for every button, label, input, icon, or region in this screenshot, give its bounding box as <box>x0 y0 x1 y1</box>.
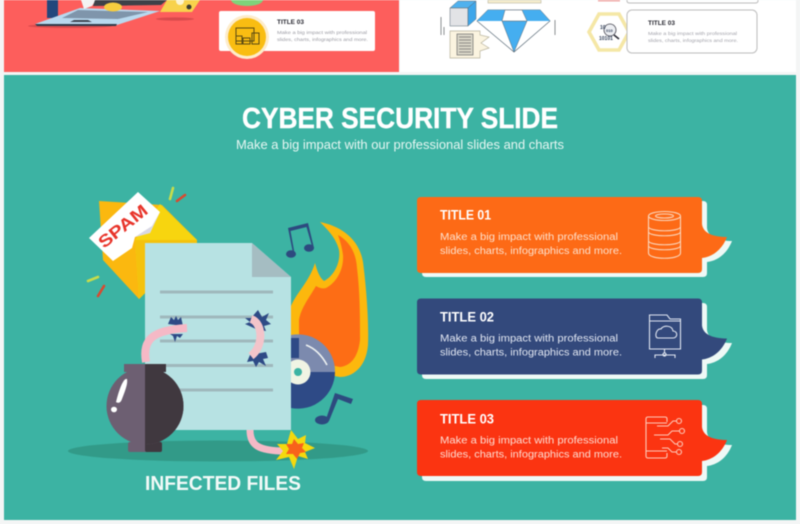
card: title 03: TITLE 03 <box>440 412 494 426</box>
icon: database <box>648 212 680 258</box>
card: title 01: Make a big impact with professional <box>440 232 618 243</box>
icon: cube <box>450 1 476 26</box>
icon: infected document <box>145 243 291 430</box>
illustration: infected files <box>68 188 368 495</box>
label: infected files: INFECTED FILES <box>145 472 301 495</box>
icon: cloud folder network <box>650 315 680 358</box>
icon: laptop with person <box>28 0 200 28</box>
card: title 03 red panel: TITLE 03 <box>277 19 304 26</box>
card: title 02: TITLE 02 <box>440 310 494 324</box>
panel: cropped red slide <box>4 0 399 72</box>
card: title 03 red panel: Make a big impact with professional <box>277 30 367 35</box>
icon: circuit phone <box>646 417 684 458</box>
card: title 02: Make a big impact with professional <box>440 334 618 344</box>
icon: worms and holes <box>145 310 285 451</box>
card: title 03 white panel: 10101 <box>599 36 613 42</box>
icon: explosion star <box>276 430 315 469</box>
icon: spam envelope <box>88 188 197 299</box>
card: title 03: Make a big impact with professional <box>440 436 618 446</box>
card: title 02 <box>417 298 732 379</box>
card: title 03 red panel: slides, charts, infographics and more. <box>277 37 368 42</box>
icon: green circle top <box>231 0 263 6</box>
icon: music note top <box>286 223 314 258</box>
icon: music note bottom <box>315 393 353 424</box>
card: title 03: slides, charts, infographics and more. <box>440 450 622 460</box>
icon: document with tab <box>450 31 489 58</box>
icon: diamond <box>441 0 555 52</box>
icon: vinyl disc <box>286 334 335 409</box>
card: title 03 <box>417 400 732 481</box>
subtitle: Make a big impact with our professional slides and charts <box>236 138 564 152</box>
card: title 01: TITLE 01 <box>440 208 491 222</box>
card stub: top <box>627 0 758 3</box>
card: title 03 white panel: 010 <box>606 28 613 33</box>
card: title 03 white panel: TITLE 03 <box>648 20 675 27</box>
card: title 03 white panel: Make a big impact with professional <box>648 31 737 36</box>
icon: bomb <box>106 364 184 452</box>
panel: cropped white slide <box>400 0 796 72</box>
card: title 02: slides, charts, infographics and more. <box>440 348 622 358</box>
card: title 03 white panel <box>589 10 757 53</box>
icon: flame <box>291 222 368 377</box>
card: title 03 white panel: 10 <box>600 25 606 31</box>
ground shadow <box>68 440 368 462</box>
card: title 03 red panel <box>219 11 375 59</box>
card: title 03 white panel: slides, charts, infographics and more. <box>648 38 738 43</box>
shape: pink stub top <box>598 0 620 2</box>
title: CYBER SECURITY SLIDE <box>242 103 558 135</box>
card: title 01: slides, charts, infographics and more. <box>440 246 622 257</box>
card: title 01 <box>417 197 732 277</box>
spam note: SPAM <box>95 201 152 252</box>
